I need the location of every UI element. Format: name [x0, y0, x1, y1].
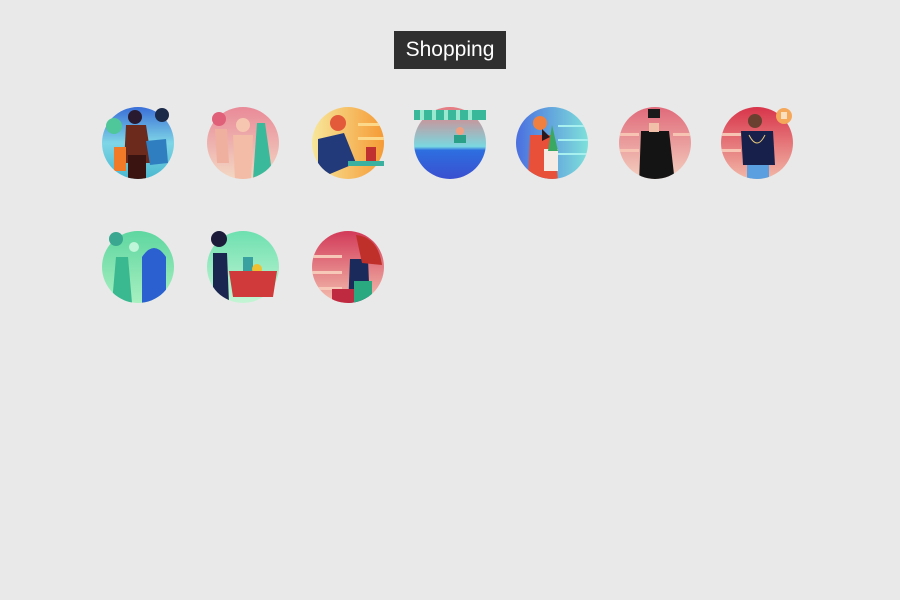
icon: man with vegetables [516, 107, 588, 181]
icon: man at counter with drink [312, 107, 384, 179]
icon: market stall [414, 107, 486, 179]
icon: man with chains [721, 107, 793, 183]
icon: woman at fitting room [102, 231, 174, 303]
icon: woman with shopping bags [102, 107, 174, 181]
title [394, 31, 506, 69]
title: Shopping [406, 38, 494, 61]
icon: woman with basket [312, 231, 384, 307]
icon: clothing shop mannequins [207, 107, 279, 181]
icon: man in black coat [619, 107, 693, 183]
icon: woman with shopping cart [207, 231, 279, 303]
